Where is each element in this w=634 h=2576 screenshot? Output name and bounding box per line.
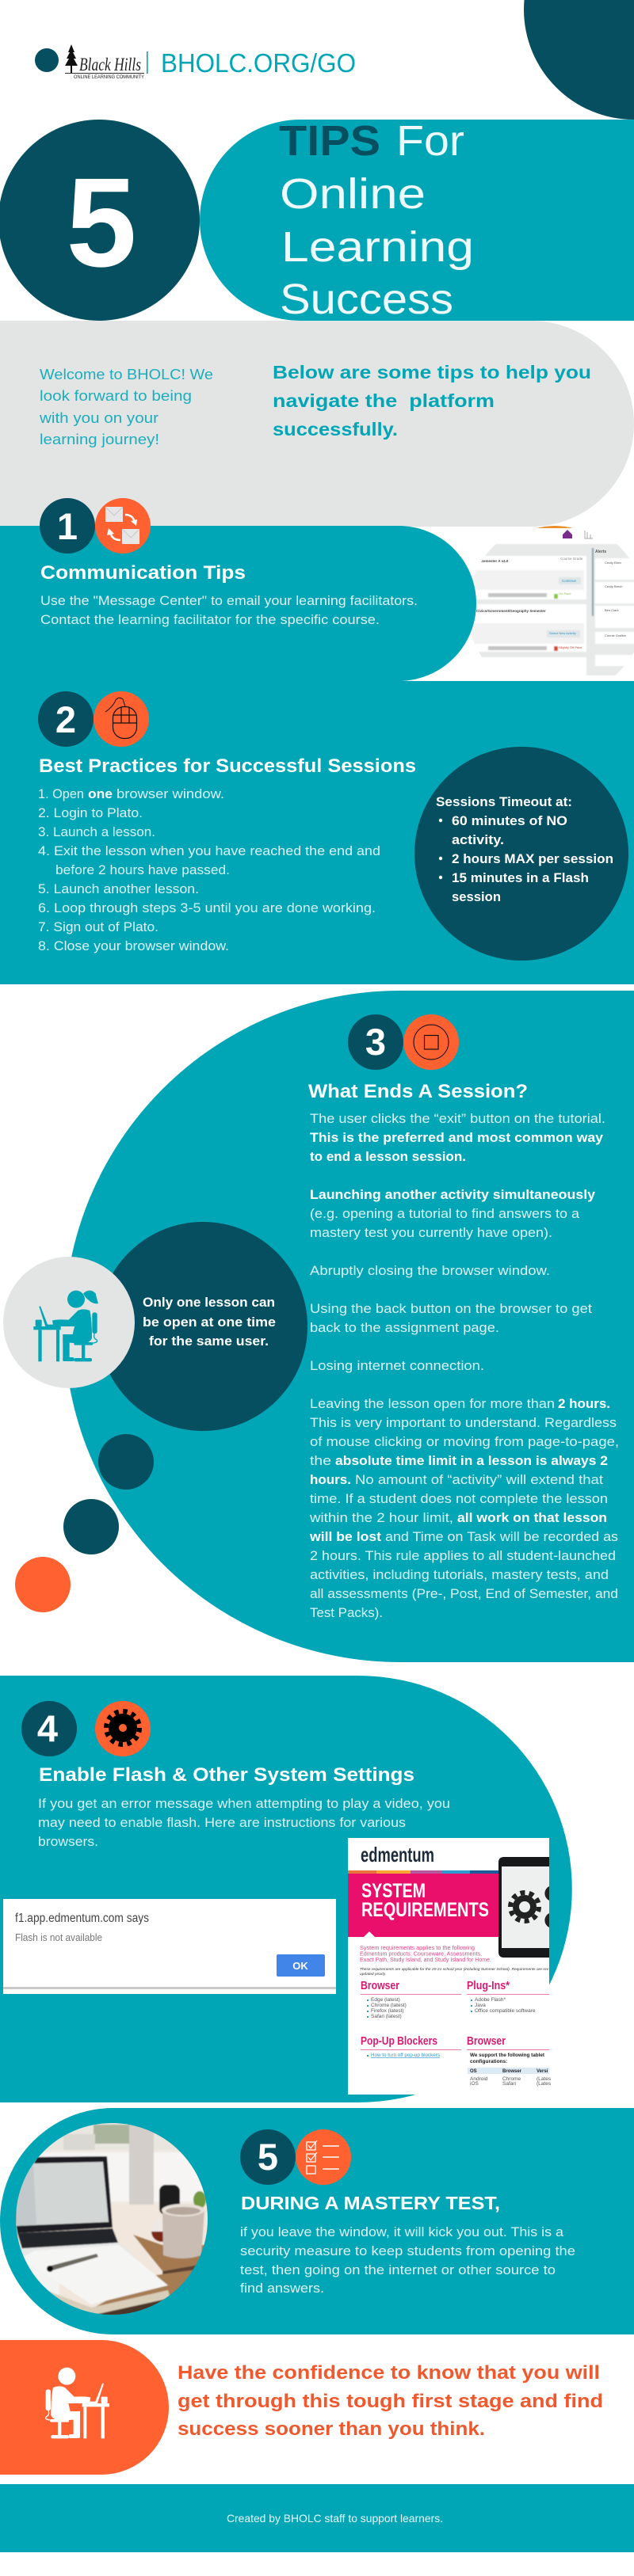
body text [240,2225,575,2296]
callout: one lesson at a time: for the same user. [149,1334,269,1349]
system requirements document: Android [470,2076,488,2082]
body text: Launching another activity simultaneously [310,1188,596,1202]
screenshot: message center: Slightly Off Pace [559,645,582,649]
screenshot: message center [468,526,634,675]
system requirements document: SYSTEM [361,1880,426,1902]
body text: Use the "Message Center" to email your learning facilitators. [40,594,418,608]
body text: If you get an error message when attempting to play a video, you [38,1797,450,1811]
welcome text: look forward to being [40,387,192,404]
badge number 1 [40,498,95,554]
body text: find answers. [240,2281,324,2296]
body text: to end a lesson session. [310,1150,466,1164]
system requirements document: edmentum [361,1843,434,1866]
body text: Test Packs). [310,1606,383,1620]
system requirements document: Edmentum products: Courseware, Assessments, [360,1950,482,1958]
numbered list: 3. Launch a lesson. [38,825,155,839]
body text: absolute time limit in a lesson is always 2 [335,1454,608,1468]
icon: home [563,530,572,538]
screenshot: message center: Cecily Brech [605,584,622,588]
alert dialog screenshot: Flash is not available [15,1932,102,1943]
website address: BHOLC.ORG/GO [161,48,356,78]
footer band [0,2484,634,2552]
screenshot: message center: Cecily Ellen [605,561,621,565]
welcome text [39,366,213,447]
title word Online: Online [280,170,426,218]
badge number 3 [348,1014,403,1070]
icon: gear [95,1701,151,1756]
closing statement [178,2362,603,2440]
system requirements document: System requirements applies to the following [360,1944,475,1951]
numbered list [38,787,380,953]
title word For: For [396,117,464,165]
badge number 5: 5 [258,2136,278,2178]
system requirements document: OS [470,2069,477,2074]
body text: within the 2 hour limit, [309,1511,453,1525]
callout: session timeouts [414,747,628,961]
closing statement: get through this tough first stage and find [178,2391,603,2412]
body text: The user clicks the “exit” button on the tutorial. [310,1112,605,1126]
badge number 2 [38,691,94,747]
body text: if you leave the window, it will kick you out. This is a [240,2225,564,2239]
welcome text: with you on your [39,409,158,426]
title word Success: Success [280,276,453,323]
panel: tip 4 [0,1676,572,2102]
body text: back to the assignment page. [310,1321,499,1335]
callout: session timeouts: 2 hours MAX per session [452,852,613,866]
system requirements document: Browser [467,2034,506,2048]
system requirements document: Pop-Up Blockers [361,2034,437,2048]
logo subtitle: ONLINE LEARNING COMMUNITY [74,74,145,80]
callout: one lesson at a time [98,1222,307,1431]
body text [38,1797,450,1849]
numbered list: 7. Sign out of Plato. [38,920,158,934]
system requirements document: configurations: [470,2059,507,2064]
alert dialog screenshot: f1.app.edmentum.com says [15,1912,149,1925]
screenshot: message center: Civics/Government/Geography Semester [476,609,546,613]
decorative circle dark lower [63,1499,119,1554]
callout: session timeouts: 15 minutes in a Flash [452,871,589,885]
body text: and Time on Task will be recorded as [385,1530,618,1544]
logo dot [35,48,59,72]
numbered list: before 2 hours have passed. [55,863,230,877]
system requirements document: Adobe Flash* [475,1997,506,2003]
screenshot: message center: Semester A v4.0 [481,559,509,563]
system requirements document: Browser [361,1979,399,1992]
screenshot: message center: Connie Grafton [605,634,626,637]
screenshot: message center: Alerts [595,550,606,554]
intro callout: successfully. [273,419,398,439]
icon: chart [585,531,593,538]
body text: This is very important to understand. Regardless [310,1416,617,1430]
body text: mastery test you currently have open). [310,1226,552,1240]
decorative circle orange [15,1557,71,1612]
system requirements document: (Lates [537,2076,552,2082]
panel: tip 2 background [0,681,634,984]
heading: What Ends A Session? [308,1081,528,1102]
decorative circle dark [98,1434,154,1490]
logo header [35,44,356,80]
body text: (e.g. opening a tutorial to find answers to a [310,1207,580,1221]
callout: session timeouts: activity. [452,833,504,847]
body text: activities, including tutorials, mastery tests, and [310,1568,609,1582]
system requirements document: Chrome [502,2076,521,2082]
system requirements document: Office compatible software [475,2008,536,2014]
badge number 4 [21,1701,77,1756]
system requirements document: updated yearly. [360,1972,386,1976]
system requirements document: Safari [502,2081,516,2087]
numbered list: one [88,787,113,801]
system requirements document: Edge (latest) [371,1997,400,2003]
system requirements document: Browser [502,2069,522,2074]
panel: intro [0,321,634,527]
body text: Contact the learning facilitator for the specific course. [40,613,380,627]
system requirements document: Firefox (latest) [371,2008,404,2014]
body text: 2 hours. [558,1397,610,1411]
numbered list: 2. Login to Plato. [38,806,143,820]
body text: Using the back button on the browser to get [310,1302,592,1316]
welcome text: learning journey! [40,431,159,447]
system requirements document: Java [475,2003,486,2008]
body text: Losing internet connection. [310,1359,484,1373]
callout: session timeouts: session [452,890,501,904]
body text: hours. [310,1473,351,1487]
icon: pine tree [65,44,78,73]
screenshot: message center: Select New Activity [549,631,576,635]
system requirements document: Exact Path, Study Island, and Study Island for Home. [360,1956,491,1963]
closing statement: success sooner than you think. [178,2418,485,2440]
panel: tip 1 [0,498,476,681]
callout: session timeouts: Sessions Timeout at: [436,795,572,809]
screenshot: message center: Course Grade [560,557,583,561]
system requirements document: Chrome (latest) [371,2003,407,2008]
body text: all assessments (Pre-, Post, End of Semester, and [310,1587,618,1601]
logo divider [147,51,148,74]
system requirements document: We support the following tablet [470,2053,545,2058]
body text: may need to enable flash. Here are instructions for various [38,1816,406,1830]
body text: test, then going on the internet or other source to [240,2263,556,2277]
icon: stop button [403,1014,459,1070]
heading: DURING A MASTERY TEST, [241,2193,500,2213]
alert dialog screenshot [3,1899,336,1994]
callout: one lesson at a time: be open at one time [143,1315,276,1330]
welcome text: Welcome to BHOLC! We [40,366,213,382]
icon: checklist [296,2129,351,2185]
callout: one lesson at a time: Only one lesson can [143,1296,275,1310]
system requirements document: How to turn off pop-up blockers [371,2053,441,2058]
numbered list: 6. Loop through steps 3-5 until you are done working. [38,901,376,915]
body text: of mouse clicking or moving from page-to-page, [310,1435,619,1449]
numbered list: 5. Launch another lesson. [38,882,199,896]
tip 2 content [38,691,628,961]
intro callout [273,362,591,439]
body text [309,1112,619,1620]
screenshot: message center: On Pace [559,592,571,595]
heading: Best Practices for Successful Sessions [39,755,416,777]
decorative corner circle [524,0,634,120]
body text: No amount of “activity” will extend that [355,1473,603,1487]
badge number 4: 4 [37,1707,58,1749]
panel: closing message [0,2340,603,2475]
numbered list: 4. Exit the lesson when you have reached the end and [38,844,380,858]
title word TIPS: TIPS [279,117,380,165]
body text: all work on that lesson [457,1511,607,1525]
title panel [200,117,634,323]
system requirements document: Versi [537,2069,548,2074]
system requirements document: Safari (latest) [371,2014,402,2019]
footer credit: Created by BHOLC staff to support learners. [227,2512,443,2525]
numbered list: 8. Close your browser window. [38,939,229,953]
system requirements document: (Lates [537,2081,552,2087]
title word Learning: Learning [281,223,474,271]
screenshot: message center: Ben Clark [605,608,619,612]
callout: session timeouts: 60 minutes of NO [452,814,567,828]
body text: 2 hours. This rule applies to all student-launched [310,1549,616,1563]
panel: tip 3 [3,991,634,1662]
icon: woman at desk [3,1257,135,1388]
system requirements document: iOS [470,2081,479,2087]
heading: Communication Tips [40,562,246,584]
icon: swapping envelopes [95,498,151,554]
intro callout: navigate the platform [273,390,495,411]
badge number 3: 3 [365,1021,386,1063]
big number 5: 5 [67,151,136,293]
icon: person at desk [46,2368,109,2438]
icon: mouse [94,691,149,747]
photo: laptop, notebook and mug [12,2118,214,2320]
big number circle [0,120,200,321]
badge number 2: 2 [55,698,76,740]
body text: Leaving the lesson open for more than [310,1397,555,1411]
system requirements document: REQUIREMENTS [361,1899,489,1921]
body text: browsers. [38,1835,98,1849]
body text: This is the preferred and most common way [310,1131,604,1145]
system requirements document [348,1838,552,2095]
orange sliver [537,526,573,528]
screenshot: message center: Continue [562,579,577,583]
alert dialog screenshot: OK [292,1960,308,1972]
body text: security measure to keep students from opening the [240,2244,575,2258]
panel: tip 5 [0,2108,634,2334]
body text: the [310,1454,331,1468]
badge number 5 [240,2129,296,2185]
body text: time. If a student does not complete the lesson [310,1492,608,1506]
heading: Enable Flash & Other System Settings [39,1764,414,1786]
intro callout: Below are some tips to help you [273,362,591,382]
body text: Abruptly closing the browser window. [310,1264,550,1278]
system requirements document: These requirements are applicable for the 20-21 school year (including Summer School). Requirements are rev [360,1967,549,1971]
closing statement: Have the confidence to know that you will [178,2362,600,2384]
logo wordmark: Black Hills [79,55,141,74]
badge number 1: 1 [57,505,78,547]
numbered list: browser window. [116,787,224,801]
system requirements document: Plug-Ins* [467,1979,510,1992]
logo underline [65,73,144,74]
body text [40,594,418,627]
numbered list: 1. Open [38,787,84,801]
body text: will be lost [309,1530,382,1544]
